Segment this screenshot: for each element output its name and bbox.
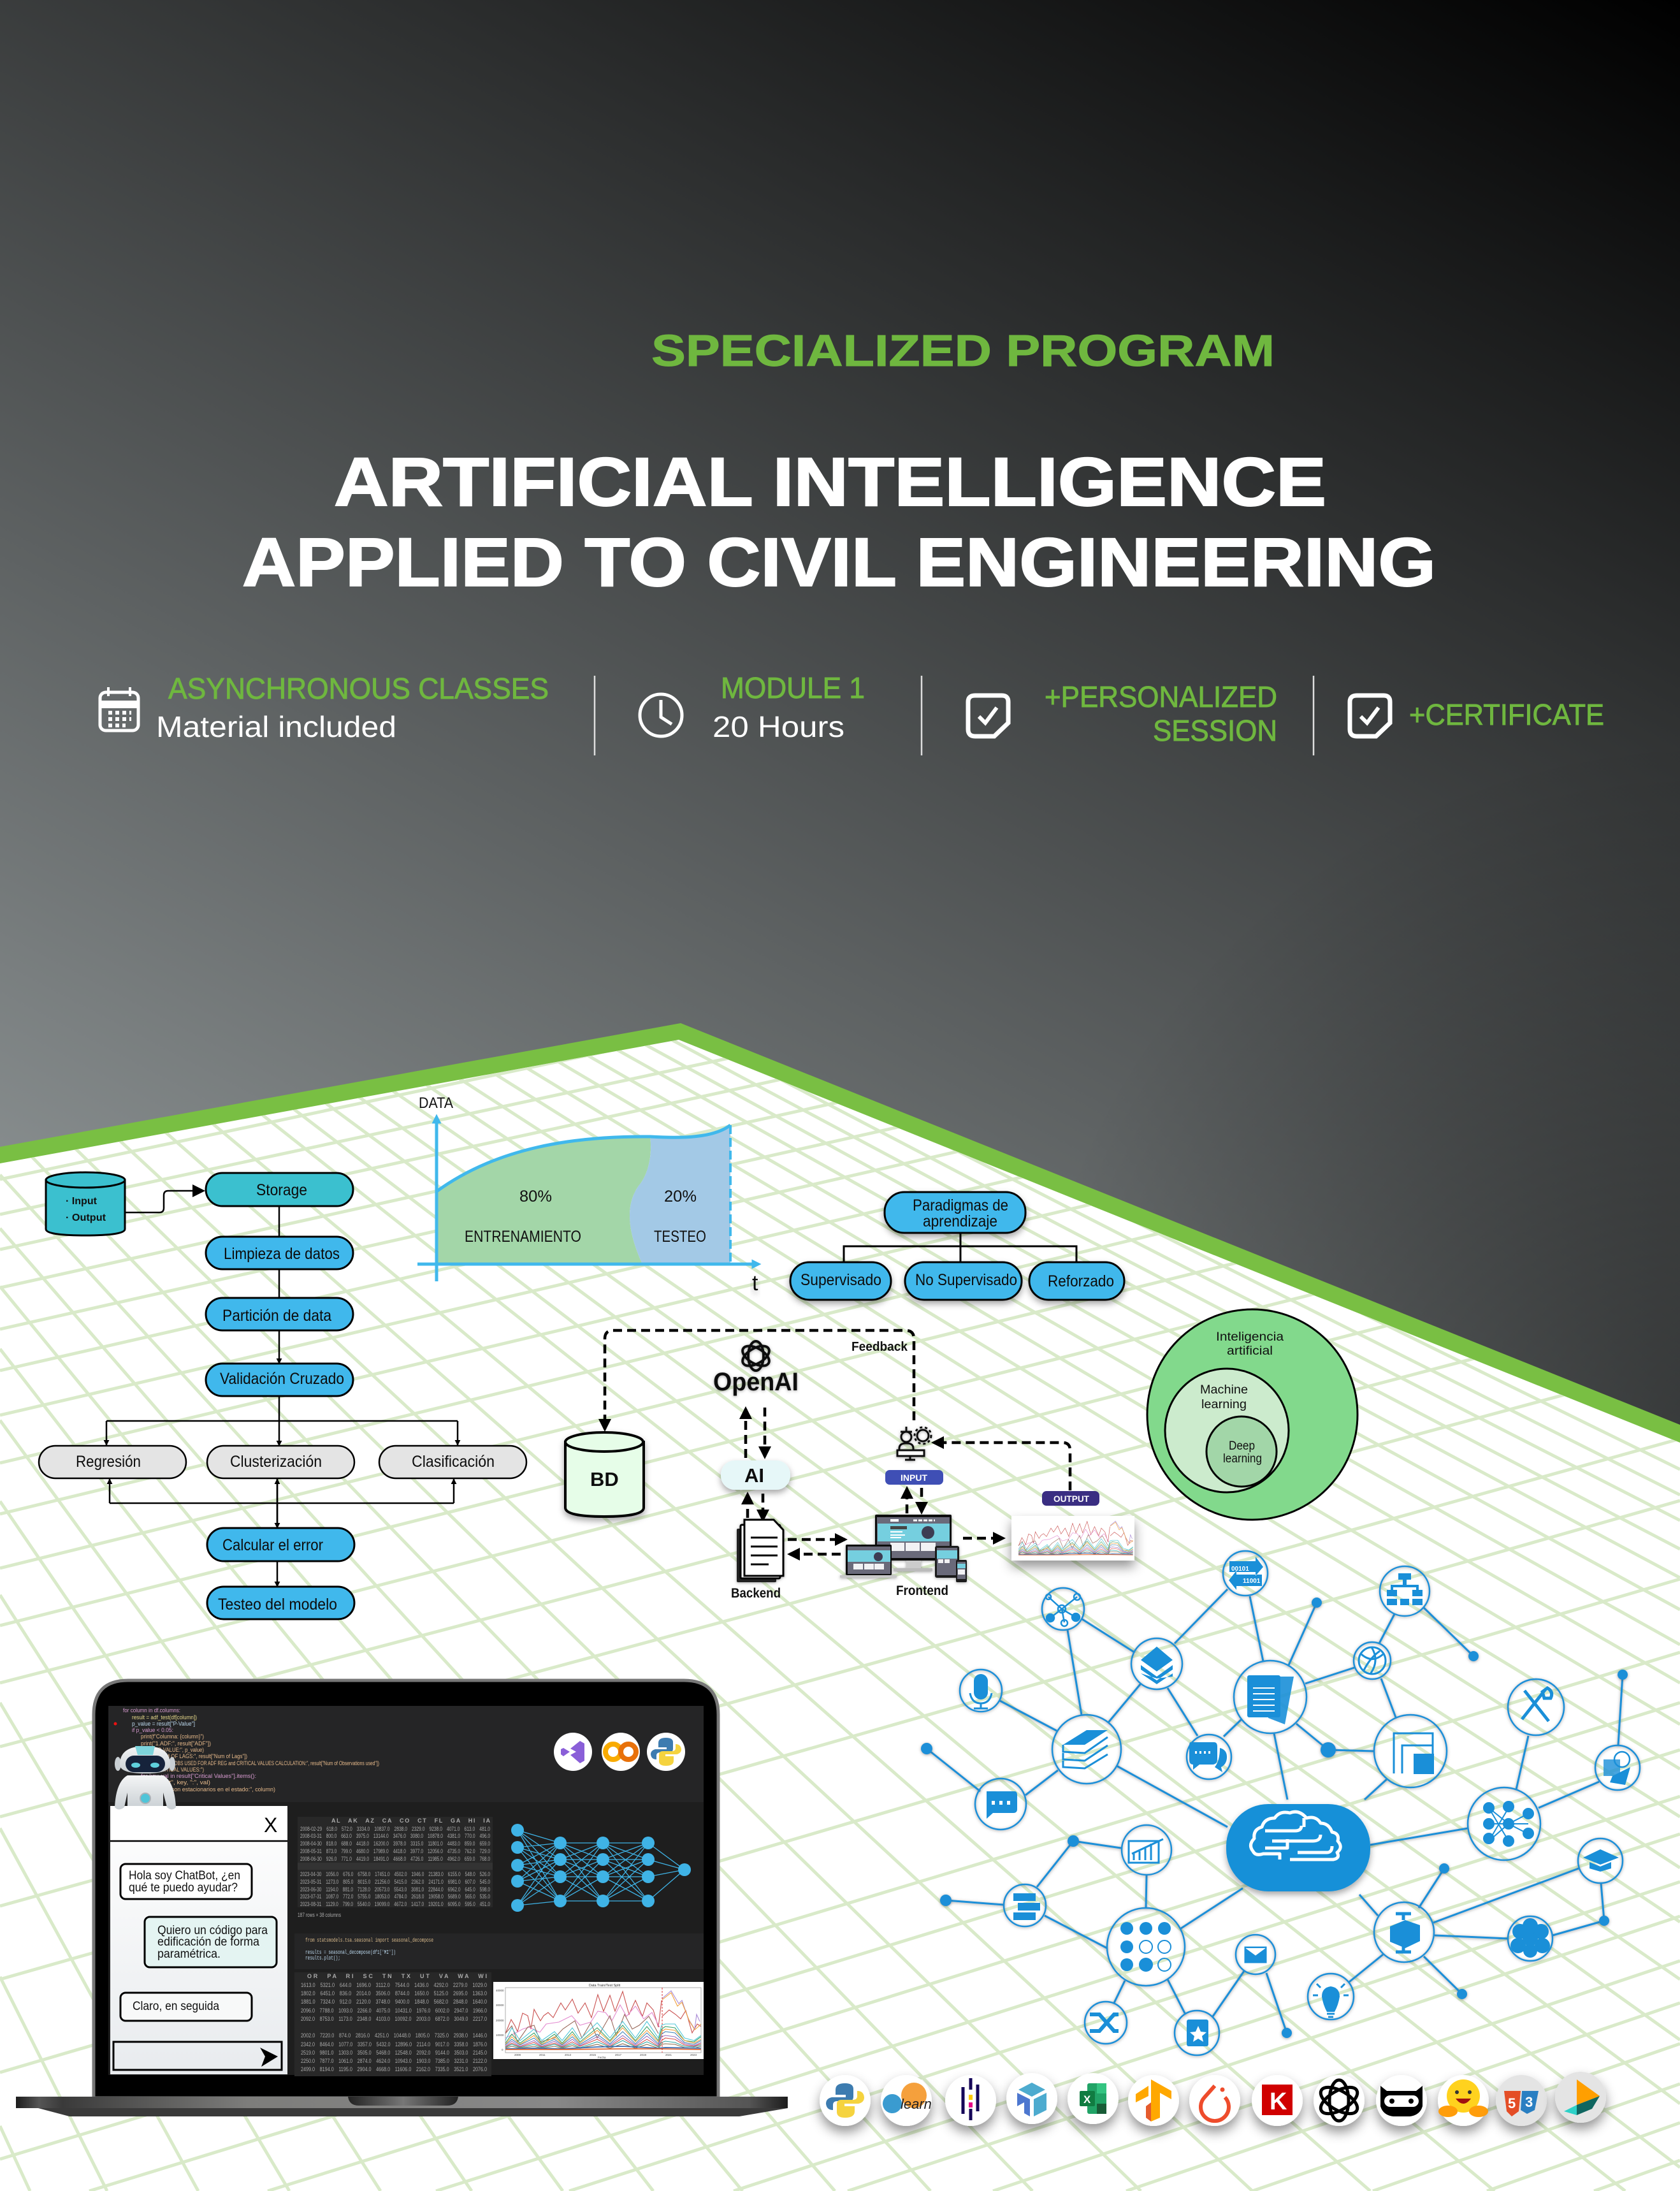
box: limpieza de datos: Limpieza de datos: [224, 1245, 340, 1263]
tool logos row: [820, 2072, 1606, 2126]
icon: binary: [1229, 1557, 1263, 1590]
chart: data train test split: 2017: [615, 2053, 622, 2056]
icon: globe network: [1359, 1647, 1386, 1674]
box: paradigmas: Paradigmas de: [913, 1197, 1008, 1214]
badge: input: [885, 1470, 943, 1485]
chart: data train test split: 2013: [565, 2053, 572, 2056]
floor with perspective grid: [0, 1040, 1680, 2191]
code panel: print("5.CRITICAL VALUES:"): [141, 1766, 204, 1773]
laptop: [16, 1680, 788, 2116]
code panel 2: results.plot();: [305, 1955, 340, 1962]
icon: flow arrows: [1013, 1893, 1040, 1920]
box: reforzado: [1029, 1262, 1124, 1300]
chart: data train test split: 2019: [640, 2053, 647, 2056]
logo: pandas: [945, 2075, 996, 2126]
box: reforzado: Reforzado: [1048, 1272, 1114, 1290]
logo: openai: OpenAI: [713, 1368, 799, 1396]
venn diagram: Deep: [1229, 1439, 1255, 1453]
box: particion de data: Partición de data: [222, 1307, 331, 1325]
box: clasificacion: Clasificación: [412, 1453, 495, 1471]
chart: data train test split: 2009: [514, 2053, 521, 2056]
box: no supervisado: No Supervisado: [915, 1271, 1017, 1289]
chart: data train test split: 2021: [665, 2053, 672, 2056]
icon: check note: [1350, 695, 1390, 736]
icon: backend documents: [737, 1520, 783, 1582]
cylinder: BD: BD: [590, 1468, 619, 1490]
logo: openai: [713, 1341, 799, 1396]
network diagram: [921, 1551, 1640, 2055]
robot mascot: [115, 1746, 176, 1809]
logo: pytorch: [1189, 2075, 1240, 2126]
badge: input: INPUT: [901, 1473, 927, 1483]
bubble: user request: paramétrica.: [157, 1947, 221, 1961]
chart: data train test split: Fecha: [598, 2056, 606, 2059]
logo: keras: K: [1270, 2088, 1287, 2115]
icon: speech bubbles: [1189, 1742, 1227, 1772]
network links: [927, 1589, 1623, 2033]
box: limpieza de datos: [206, 1237, 353, 1269]
box: AI: AI: [744, 1464, 764, 1487]
chart: train test split: 20%: [664, 1188, 697, 1205]
title: [242, 443, 1436, 601]
table 2: OR PA RI SC TN TX UT VA WA WI: [307, 1973, 487, 1979]
badge: output: OUTPUT: [1054, 1494, 1089, 1504]
logo: python: [647, 1733, 685, 1771]
logo: deployment prism: [1555, 2072, 1606, 2123]
chart: data train test split: 2015: [590, 2053, 597, 2056]
box: clusterizacion: Clusterización: [230, 1453, 322, 1471]
logo: keras: [1252, 2075, 1303, 2126]
icon: shuffle: [1090, 2014, 1119, 2031]
icon: graduation cap: [1583, 1849, 1619, 1872]
box: storage: Storage: [256, 1181, 307, 1199]
icon: calendar: [100, 687, 138, 731]
icon: tools: [1522, 1688, 1552, 1721]
box: regresion: Regresión: [76, 1453, 141, 1471]
label: frontend: Frontend: [896, 1583, 948, 1598]
info: personalized session: [1045, 680, 1277, 747]
table 2: 2092.0 8753.0 1173.0 2348.0 4103.0 10092.0 2003.0 6872.0 3049.0 2217.0: [301, 2016, 487, 2022]
table 2: 2096.0 7788.0 1093.0 2266.0 4075.0 10431.0 1976.0 6002.0 2947.0 1966.0: [301, 2007, 487, 2014]
title: APPLIED TO CIVIL ENGINEERING: [242, 523, 1436, 601]
bubble: user request: edificación de forma: [157, 1935, 259, 1949]
chart: train test split: DATA: [419, 1095, 453, 1112]
table 2: 2250.0 7877.0 1061.0 2874.0 4624.0 10943.0 1903.0 7385.0 3231.0 2122.0: [301, 2058, 487, 2064]
box: supervisado: [790, 1262, 891, 1300]
chart: data train test split: 20000: [496, 2019, 504, 2022]
info: module: [713, 671, 865, 743]
bubble: user request: [145, 1917, 277, 1967]
network small dots: [921, 1598, 1628, 2038]
box: calcular el error: [207, 1528, 354, 1561]
table 1: 2023-04-30 1056.0 676.0 6758.0 17451.0 4502.0 1946.0 21383.0 6155.0 548.0 526.0: [300, 1871, 490, 1877]
logo: hugging face: [1438, 2075, 1489, 2126]
chart: data train test split: Data Train/Test Split: [589, 1984, 621, 1988]
chart: train test split: 80%: [519, 1188, 552, 1205]
venn diagram: artificial: [1227, 1344, 1273, 1358]
paradigms tree: [790, 1192, 1124, 1300]
chart: data train test split: 2023: [690, 2053, 697, 2056]
chat panel: [110, 1806, 287, 2074]
chart: data train test split: 30000: [496, 2004, 504, 2007]
info: module: 20 Hours: [713, 710, 844, 743]
code panel: print("1.ADF:", result["ADF"]): [141, 1740, 211, 1747]
table 2: 1802.0 6451.0 836.0 2014.0 3506.0 8744.0 1650.0 5125.0 2695.0 1363.0: [301, 1990, 487, 1997]
table 2: 1613.0 5321.0 644.0 1696.0 3112.0 7544.0 1436.0 4292.0 2279.0 1029.0: [301, 1982, 487, 1988]
code panel: print("\t", key, ":", val): [150, 1779, 210, 1786]
icon: layers: [1141, 1647, 1173, 1684]
icon: bulb: [1313, 1984, 1349, 2017]
venn diagram: learning: [1223, 1452, 1262, 1466]
code panel: result = adf_test(df[column]): [132, 1714, 197, 1721]
chat input: [113, 2042, 282, 2070]
info: personalized session: +PERSONALIZED: [1045, 680, 1277, 713]
logo: tensorflow: [1128, 2075, 1179, 2126]
dashed arrows: [605, 1330, 1070, 1554]
logo: colab: [602, 1733, 640, 1771]
box: testeo del modelo: Testeo del modelo: [218, 1596, 337, 1613]
box: storage: [206, 1173, 353, 1206]
neural network: [511, 1824, 691, 1912]
code panel: for key, val in result["Critical Values"].items():: [141, 1773, 256, 1779]
box: paradigmas: [885, 1192, 1025, 1233]
table 1: 2023-05-31 1273.0 805.0 8015.0 21256.0 5415.0 2362.0 24171.0 6981.0 607.0 545.0: [300, 1879, 490, 1885]
node icons: [970, 1557, 1630, 2046]
cylinder: input output: · Output: [66, 1212, 106, 1223]
label: feedback: Feedback: [851, 1340, 908, 1354]
logo: ninja bot: [1376, 2075, 1427, 2126]
table 1: 2008-02-29 618.0 572.0 3334.0 10837.0 2838.0 2329.0 9238.0 4071.0 613.0 481.0: [300, 1826, 490, 1832]
code panel 2: [294, 1933, 704, 1969]
venn diagram: Machine: [1200, 1383, 1248, 1397]
table 2: 1881.0 7324.0 912.0 2120.0 3748.0 9400.0 1848.0 5682.0 2848.0 1640.0: [301, 1998, 487, 2005]
table 1: 2008-05-31 873.0 799.0 4680.0 17989.0 4418.0 3977.0 12056.0 4735.0 762.0 729.0: [300, 1848, 490, 1854]
chart: train test split: ENTRENAMIENTO: [465, 1228, 581, 1246]
eyebrow heading: SPECIALIZED PROGRAM: [651, 326, 1275, 375]
table 1: 187 rows × 38 columns: [298, 1912, 341, 1918]
code panel: p_value = result["P-Value"]: [132, 1721, 195, 1727]
logo: scikit-learn: [881, 2075, 932, 2126]
info: asynchronous classes: [156, 672, 549, 743]
icon: report: [1604, 1752, 1630, 1785]
box: validacion cruzado: Validación Cruzado: [220, 1370, 344, 1388]
table 1: AL AK AZ CA CO CT FL GA HI IA: [331, 1817, 491, 1824]
code panel: [108, 1706, 704, 2075]
box: regresion: [39, 1446, 186, 1478]
logo: excel: X: [1083, 2093, 1091, 2106]
bubble: chatbot greeting: qué te puedo ayudar?: [129, 1881, 238, 1895]
table 1: [298, 1817, 493, 1918]
badge: output: [1042, 1491, 1099, 1506]
box: particion de data: [206, 1298, 353, 1330]
chart: train test split: [417, 1095, 758, 1295]
architecture diagram: [565, 1330, 1134, 1601]
bubble: chatbot reply: [120, 1993, 252, 2021]
table 2: [294, 1972, 491, 2076]
logo: excel: [1068, 2073, 1119, 2124]
bubble: chatbot greeting: [120, 1864, 252, 1899]
code panel: print(f"Columna: {column}"): [141, 1733, 204, 1740]
laptop base: [16, 2097, 788, 2116]
icon: star card: [1187, 2020, 1208, 2046]
icon: envelope: [1244, 1946, 1267, 1963]
icon: window: [1394, 1733, 1434, 1774]
logo: scikit-learn: learn: [901, 2096, 932, 2112]
table 2: 2499.0 8194.0 1195.0 2904.0 4668.0 11606.0 2162.0 7335.0 3521.0 2076.0: [301, 2066, 487, 2072]
box: AI: [721, 1460, 790, 1490]
bubble: user request: Quiero un código para: [157, 1924, 268, 1937]
code panel 2: results = seasonal_decompose(df1['MI']): [305, 1949, 396, 1956]
logo: python: [820, 2075, 871, 2126]
table 1: 2008-03-31 800.0 663.0 3975.0 13144.0 3476.0 3080.0 10878.0 4381.0 770.0 496.0: [300, 1833, 490, 1839]
logo: openai: [1314, 2075, 1365, 2126]
table 2: 2002.0 7220.0 874.0 2816.0 4251.0 10448.0 1805.0 7325.0 2938.0 1446.0: [301, 2032, 487, 2039]
chart: train test split: TESTEO: [654, 1228, 706, 1246]
cylinder: input output: [46, 1172, 125, 1235]
connectors: [106, 1191, 458, 1587]
info bar: [100, 671, 1604, 755]
icon: books: [1063, 1730, 1108, 1768]
code panel: print("3.NUM OF LAGS:", result["Num of Lags"]): [141, 1753, 247, 1759]
icon: growth chart: [1129, 1839, 1163, 1863]
icon: flower cluster: [1510, 1918, 1550, 1958]
title: ARTIFICIAL INTELLIGENCE: [334, 443, 1326, 520]
bubble: chatbot reply: Claro, en seguida: [133, 2000, 219, 2013]
info: certificate: +CERTIFICATE: [1409, 698, 1604, 731]
table 1: 2008-04-30 818.0 688.0 4418.0 16200.0 3978.0 3315.0 11801.0 4483.0 859.0 659.0: [300, 1840, 490, 1847]
table 1: 2023-06-30 1194.0 881.0 7128.0 20573.0 5543.0 3081.0 22844.0 6962.0 645.0 598.0: [300, 1886, 490, 1893]
cylinder: BD: [565, 1432, 644, 1517]
box: no supervisado: [905, 1262, 1022, 1300]
icon: message: [987, 1791, 1017, 1819]
flowchart: [39, 1172, 526, 1619]
venn diagram: [1147, 1309, 1358, 1520]
code panel 2: from statsmodels.tsa.seasonal import seasonal_decompose: [305, 1937, 433, 1944]
table 1: 2008-06-30 926.0 771.0 4419.0 18491.0 4668.0 4726.0 11985.0 4962.0 659.0 768.0: [300, 1856, 490, 1862]
chart: train test split: t: [752, 1271, 758, 1295]
logo: numpy: [1006, 2073, 1057, 2124]
table 2: 2342.0 8464.0 1077.0 3357.0 5432.0 12896.0 2114.0 9017.0 3358.0 1876.0: [301, 2041, 487, 2048]
laptop lid: [94, 1680, 718, 2098]
logo: html css: 3: [1525, 2094, 1533, 2110]
box: clasificacion: [379, 1446, 526, 1478]
icon: share nodes: [1046, 1594, 1080, 1626]
green floor border: [0, 1023, 1680, 1447]
label: backend: Backend: [731, 1586, 781, 1601]
cylinder: input output: · Input: [66, 1196, 98, 1207]
table 2: 2519.0 9801.0 1303.0 3505.0 5468.0 12548.0 2092.0 9144.0 3503.0 2145.0: [301, 2049, 487, 2056]
center brain box: [1226, 1804, 1370, 1891]
info: module: MODULE 1: [721, 671, 865, 704]
close x: X: [264, 1814, 277, 1837]
code panel: if p_value < 0.05:: [132, 1727, 173, 1733]
chart: data train test split: 2011: [539, 2053, 546, 2056]
box: validacion cruzado: [206, 1364, 353, 1396]
icon: binary: 00101: [1231, 1566, 1249, 1573]
box: testeo del modelo: [207, 1587, 354, 1619]
box: paradigmas: aprendizaje: [923, 1212, 997, 1230]
chart: data train test split: 40000: [496, 1989, 504, 1992]
logo: visual studio: [554, 1733, 592, 1771]
icon: documents: [1247, 1675, 1294, 1724]
table 1: 2023-08-31 1129.0 799.0 5540.0 19099.0 4672.0 1417.0 19201.0 6095.0 595.0 451.0: [300, 1901, 490, 1907]
box: calcular el error: Calcular el error: [222, 1536, 323, 1554]
chart: output forecast: [1011, 1516, 1134, 1561]
icon: cube: [1390, 1914, 1420, 1952]
node rings: [960, 1551, 1640, 2055]
code panel: for column in df.columns:: [123, 1707, 180, 1714]
icon: frontend devices: [840, 1515, 967, 1582]
bubble: chatbot greeting: Hola soy ChatBot, ¿en: [129, 1869, 240, 1882]
venn diagram: Inteligencia: [1216, 1330, 1284, 1344]
table 1: 2023-07-31 1087.0 772.0 5755.0 18053.0 4784.0 2618.0 19058.0 5689.0 565.0 535.0: [300, 1893, 490, 1900]
info: asynchronous classes: Material included: [156, 710, 396, 743]
icon: hierarchy: [1387, 1573, 1423, 1605]
logo: html css: 5: [1508, 2095, 1516, 2111]
box: clusterizacion: [207, 1446, 354, 1478]
icon: binary: 11001: [1243, 1578, 1261, 1585]
chart: data train test split: 0: [502, 2048, 503, 2051]
icon: microphone: [970, 1674, 992, 1708]
chart: data train test split: [493, 1982, 704, 2059]
info: asynchronous classes: ASYNCHRONOUS CLASSES: [168, 672, 549, 705]
icon: clock: [640, 694, 682, 736]
info: personalized session: SESSION: [1153, 714, 1277, 747]
icon: check note: [968, 695, 1008, 736]
code panel: print("2.P-VALUE:", p_value): [141, 1747, 204, 1753]
chart: data train test split: 10000: [496, 2034, 504, 2037]
code panel: print("datos son estacionarios en el estado:", column): [141, 1786, 275, 1793]
box: supervisado: Supervisado: [800, 1271, 881, 1289]
venn diagram: learning: [1201, 1398, 1247, 1411]
code panel: print("4.NUM OF OBS USED FOR ADF REG and CRITICAL VALUES CALCULATION:", result["Num of Observations used"]): [141, 1760, 379, 1766]
icon: neural network: [1484, 1802, 1533, 1846]
icon: engineer with gear: [897, 1427, 931, 1460]
logo: html css: [1496, 2075, 1547, 2126]
icon: dots grid: [1120, 1922, 1171, 1972]
